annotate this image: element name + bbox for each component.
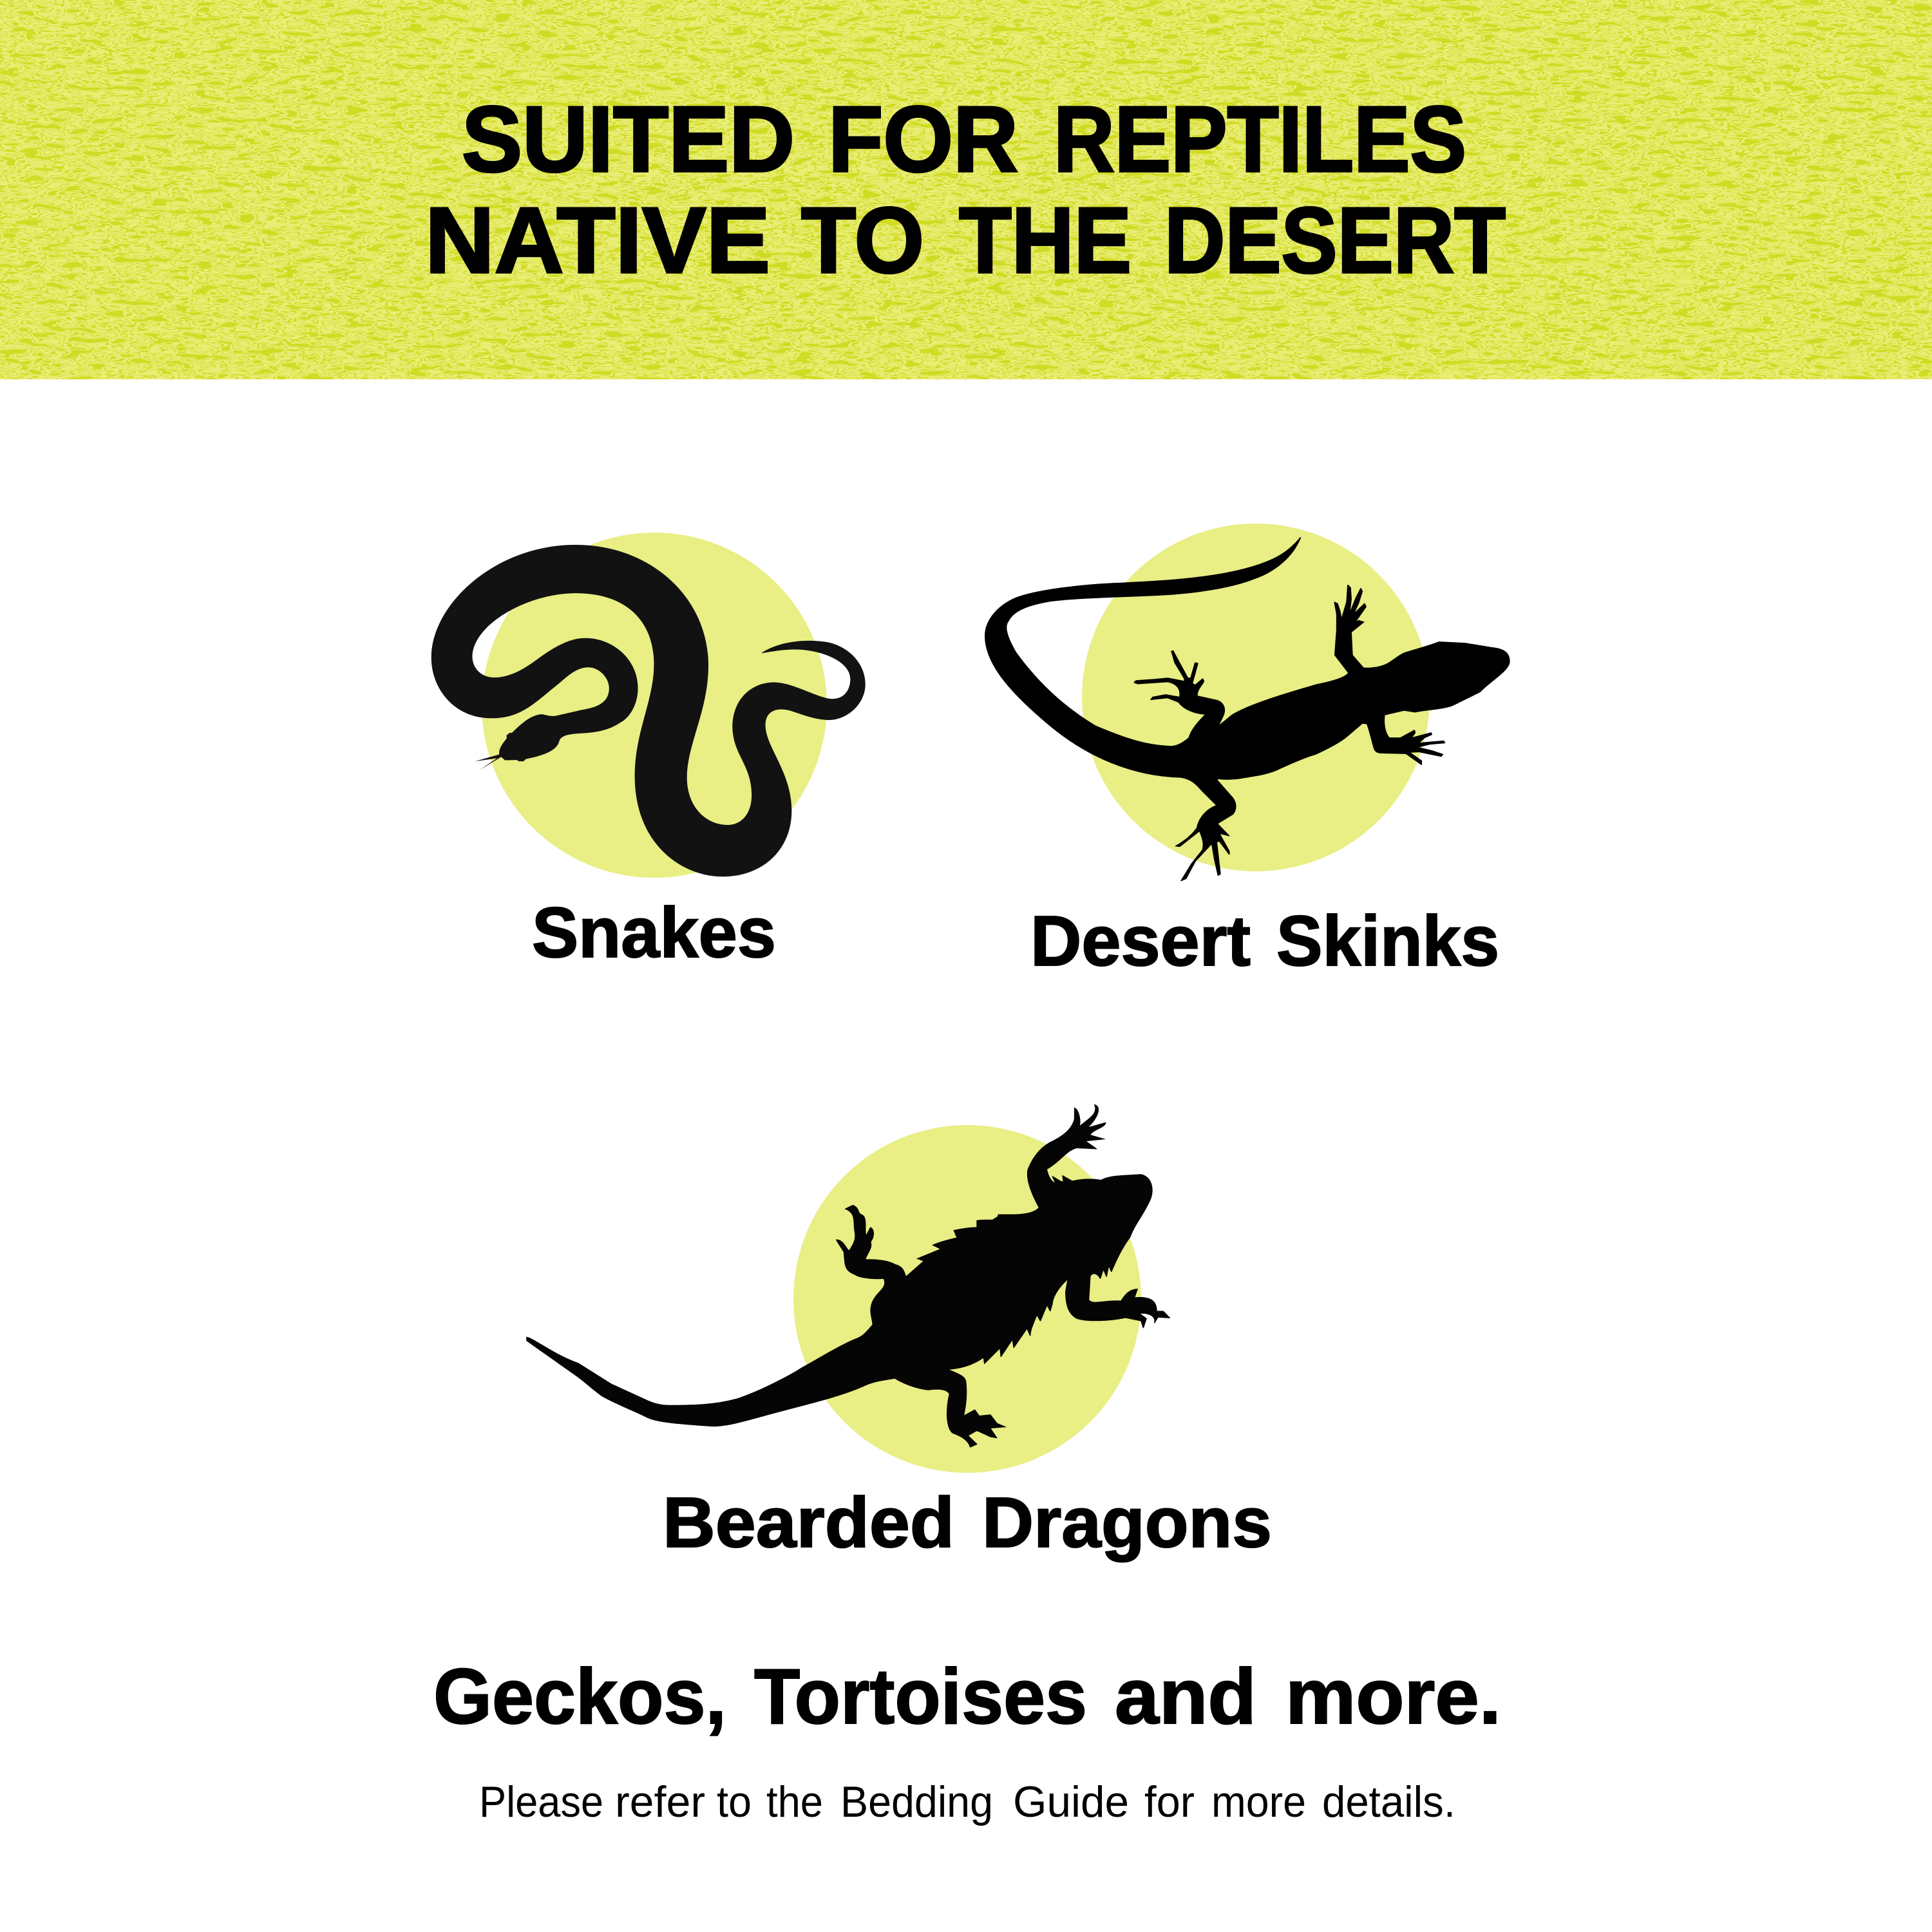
footnote: bedding guide: details. xyxy=(1322,1777,1455,1826)
icon: bearded dragon silhouette xyxy=(527,1104,1170,1447)
title: THE xyxy=(959,188,1132,292)
panel: bearded dragons xyxy=(527,1104,1272,1562)
dragon backdrop circle xyxy=(793,1125,1141,1473)
footnote: bedding guide: more xyxy=(1211,1777,1306,1826)
banner texture background xyxy=(0,0,1932,379)
title: TO xyxy=(801,188,924,292)
footnote: bedding guide: refer xyxy=(615,1777,705,1826)
title xyxy=(425,87,1506,292)
label: desert skinks: Desert xyxy=(1030,902,1251,981)
subheading: other reptiles: and xyxy=(1115,1653,1256,1740)
footnote: bedding guide: to xyxy=(717,1777,752,1826)
footnote: bedding guide: Bedding xyxy=(840,1777,993,1826)
title: REPTILES xyxy=(1054,87,1466,191)
footnote: bedding guide: the xyxy=(766,1777,823,1826)
icon: snake silhouette xyxy=(431,545,866,876)
title: DESERT xyxy=(1164,188,1506,292)
subheading: other reptiles: more. xyxy=(1285,1653,1501,1740)
label: bearded dragons: Bearded xyxy=(663,1483,954,1562)
label: desert skinks: Skinks xyxy=(1276,902,1499,981)
title: NATIVE xyxy=(425,188,770,292)
title: FOR xyxy=(828,87,1018,191)
skink backdrop circle xyxy=(1082,524,1430,871)
label: bearded dragons: Dragons xyxy=(982,1483,1272,1562)
panel: header banner xyxy=(0,0,1932,379)
footnote: bedding guide: Please xyxy=(479,1777,603,1826)
footnote: bedding guide: for xyxy=(1144,1777,1195,1826)
panel: desert skinks xyxy=(985,524,1510,981)
footnote: bedding guide: Guide xyxy=(1013,1777,1129,1826)
label: snakes: Snakes xyxy=(532,893,776,972)
panel: snakes xyxy=(431,533,866,972)
snake backdrop circle xyxy=(482,533,827,878)
subheading: other reptiles: Geckos, xyxy=(433,1653,726,1740)
subheading: other reptiles: Tortoises xyxy=(754,1653,1087,1740)
icon: skink silhouette xyxy=(985,538,1510,881)
title: SUITED xyxy=(462,87,795,191)
